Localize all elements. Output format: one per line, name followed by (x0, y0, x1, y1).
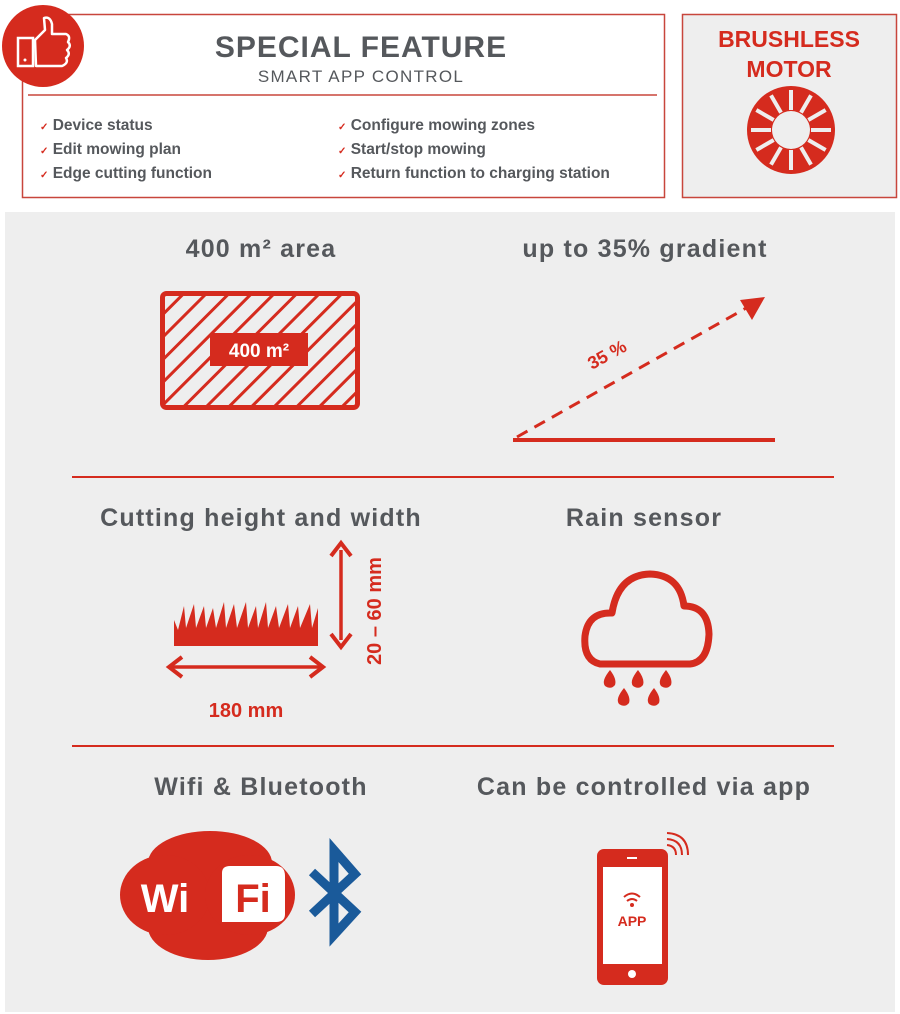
feature list: ✓ Return function to charging station (338, 165, 610, 182)
feature list (40, 117, 610, 182)
panel: special feature (22, 14, 664, 198)
panel: specifications (5, 212, 895, 1012)
panel: brushless motor (682, 14, 896, 198)
icon: phone app: APP (618, 913, 646, 929)
heading: rain: Rain sensor (566, 504, 722, 532)
icon: area rectangle (162, 294, 358, 408)
heading: wifi: Wifi & Bluetooth (154, 773, 368, 801)
icon: thumbs up (2, 5, 84, 87)
panel: brushless motor: MOTOR (746, 56, 832, 82)
icon: gradient: 35 % (584, 336, 630, 373)
icon: wifi logo: Fi (235, 877, 271, 921)
icon: grass with dimensions: 20 – 60 mm (364, 557, 386, 665)
subtitle: SMART APP CONTROL (258, 67, 464, 86)
icon: wifi logo (120, 831, 295, 960)
icon: area rectangle: 400 m² (229, 341, 289, 362)
panel: brushless motor: BRUSHLESS (718, 26, 860, 52)
feature list: ✓ Edge cutting function (40, 165, 212, 182)
feature list: ✓ Edit mowing plan (40, 141, 181, 158)
heading: app: Can be controlled via app (477, 773, 811, 801)
icon: phone app (597, 833, 688, 985)
feature list: ✓ Device status (40, 117, 153, 134)
feature list: ✓ Start/stop mowing (338, 141, 486, 158)
heading: cutting: Cutting height and width (100, 504, 422, 532)
icon: grass with dimensions (169, 543, 386, 722)
icon: rain cloud (585, 574, 709, 706)
feature list: ✓ Configure mowing zones (338, 117, 535, 134)
title: SPECIAL FEATURE (215, 31, 507, 64)
icon: motor (747, 86, 835, 174)
icon: bluetooth (312, 850, 355, 935)
icon: grass with dimensions: 180 mm (209, 700, 283, 722)
heading: gradient: up to 35% gradient (522, 235, 768, 263)
heading: area: 400 m² area (186, 235, 336, 263)
icon: wifi logo: Wi (141, 877, 189, 921)
icon: gradient (513, 297, 775, 440)
